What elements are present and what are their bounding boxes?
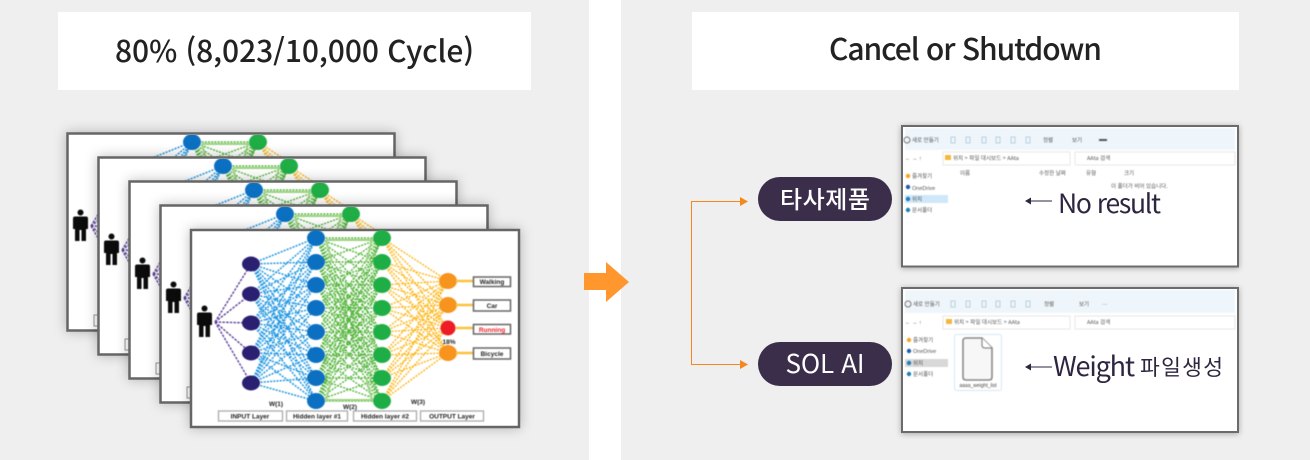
output labels: 18% (442, 339, 456, 346)
screenshot: file explorer, no result: 문서폴더 (912, 206, 932, 214)
screenshot: file explorer, no result: 크기 (1124, 169, 1134, 177)
screenshot: file explorer, weight file: 보기 (1079, 300, 1089, 308)
screenshot: file explorer, no result: 위치 (912, 195, 922, 203)
arrow: branching connector (692, 197, 748, 369)
screenshot: file explorer, no result: 수정한 날짜 (1039, 169, 1066, 177)
card: back layer 2 (98, 158, 426, 354)
panel: right background (621, 0, 1310, 460)
layer weights (269, 399, 425, 411)
screenshot: file explorer, weight file: OneDrive (913, 349, 936, 355)
callout: no result: No result (1058, 182, 1161, 221)
pill: SOL AI (758, 342, 892, 386)
screenshot: file explorer, weight file: 문서폴더 (913, 370, 933, 378)
screenshot: file explorer, no result: 정렬 (1043, 136, 1053, 144)
stacked neural network cards (68, 134, 519, 427)
layer weights: W(2) (343, 404, 357, 411)
layer labels: INPUT Layer (231, 414, 270, 420)
output labels: Walking (480, 279, 504, 286)
screenshot: file explorer, no result: 유형 (1086, 169, 1096, 177)
output labels: Running (479, 327, 505, 334)
heading: 80% cycle (58, 12, 531, 90)
screenshot: file explorer, no result: ← → ↑ (905, 156, 922, 162)
screenshot: file explorer, no result: AAta 검색 (1087, 154, 1110, 162)
screenshot: file explorer, weight file: ··· (1102, 302, 1108, 308)
output labels (442, 277, 510, 359)
screenshot: file explorer, no result: 이름 (960, 169, 970, 177)
heading: cancel or shutdown: Cancel or Shutdown (829, 25, 1102, 69)
screenshot: file explorer, weight file: 정렬 (1044, 300, 1054, 308)
screenshot: file explorer, no result: OneDrive (912, 186, 935, 192)
arrow: large orange (584, 262, 629, 302)
screenshot: file explorer, no result: 즐겨찾기 (912, 172, 932, 180)
screenshot: file explorer, no result: 새로 만들기 (912, 136, 939, 144)
layer labels: Hidden layer #1 (293, 414, 341, 420)
icon: weight file (954, 334, 1002, 390)
callout: weight file created: 파일생성 (1140, 351, 1223, 382)
card: back layer 4 (160, 206, 488, 402)
card: front neural network diagram (191, 230, 519, 427)
screenshot: file explorer, weight file: 위치 > 파일 대시보드 > AAta (954, 318, 1020, 326)
layer labels (218, 411, 484, 421)
pill: SOL AI: SOL AI (786, 344, 864, 381)
output labels: Car (487, 303, 498, 310)
output nodes (439, 273, 473, 361)
screenshot: file explorer, weight file: AAta 검색 (1087, 318, 1110, 326)
screenshot: file explorer, no result: 보기 (1072, 136, 1082, 144)
callout: weight file created: Weight (1053, 345, 1135, 384)
screenshot: file explorer, weight file (902, 288, 1238, 432)
callout: weight file created (1025, 345, 1223, 384)
icon: weight file: aaaa_weight_list (959, 383, 997, 389)
layer labels: OUTPUT Layer (429, 414, 475, 420)
output labels: Bicycle (481, 351, 504, 358)
screenshot: file explorer, weight file: 즐겨찾기 (913, 336, 933, 344)
screenshot: file explorer, weight file: 위치 (913, 359, 923, 367)
screenshot: file explorer, weight file: 새로 만들기 (913, 300, 940, 308)
pill: 타사제품 (758, 177, 892, 221)
layer weights: W(3) (411, 399, 425, 406)
screenshot: file explorer, weight file: ← → ↑ (905, 320, 922, 326)
screenshot: file explorer, no result: 위치 > 파일 대시보드 > AAta (953, 154, 1019, 162)
layer labels: Hidden layer #2 (361, 414, 409, 420)
card: back layer 3 (130, 182, 456, 378)
screenshot: file explorer, no result: 이 폴더가 비어 있습니다. (1111, 182, 1168, 190)
panel: left background (0, 0, 589, 460)
screenshot: file explorer, no result (902, 126, 1238, 266)
pill: 타사제품: 타사제품 (780, 180, 870, 215)
heading: 80% cycle: 80% (8,023/10,000 Cycle) (115, 27, 474, 71)
layer weights: W(1) (269, 401, 283, 408)
card: back layer 1 (68, 134, 394, 330)
heading: cancel or shutdown (692, 12, 1239, 90)
